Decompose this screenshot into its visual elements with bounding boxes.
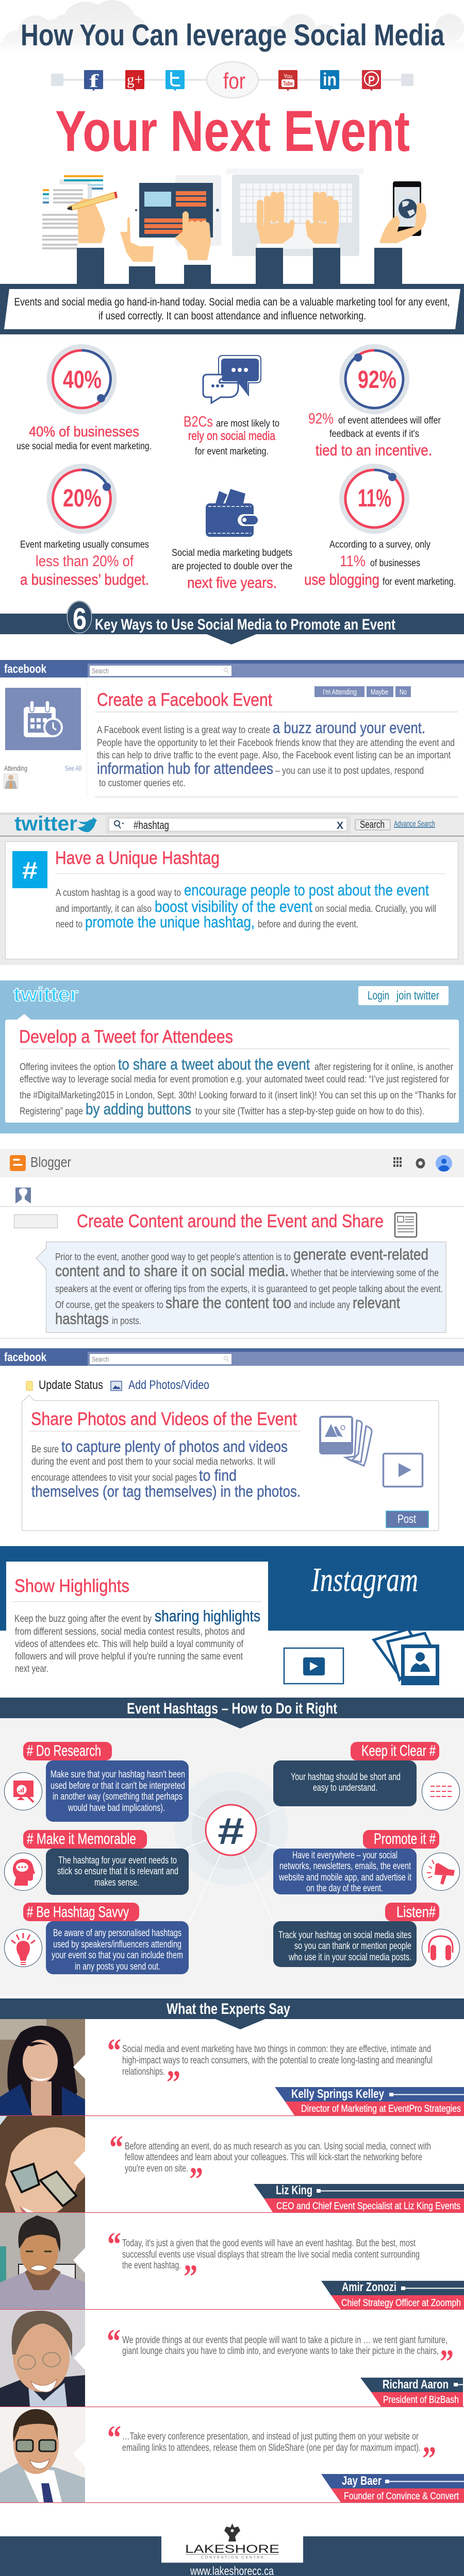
document and writing hand xyxy=(42,175,118,284)
stat: 92% of event attendees: 92% xyxy=(308,411,334,427)
tip: make it memorable: makes sense. xyxy=(94,1877,139,1888)
icon: google plus xyxy=(125,70,144,91)
tip: listen: Track your hashtag on social media sites xyxy=(278,1930,411,1941)
stat: budgets to double: next five years. xyxy=(187,574,277,591)
tip: be hashtag savvy: in any posts you send out. xyxy=(75,1961,160,1972)
tip: promote it xyxy=(273,1830,460,1894)
update status tabs: Add Photos/Video xyxy=(128,1378,209,1392)
heading: What the Experts Say xyxy=(167,2001,290,2018)
quote: Jay Baer: “ xyxy=(107,2419,121,2456)
icon: document xyxy=(395,1213,417,1237)
blue note card: in posts. xyxy=(112,1316,141,1327)
tip: do research: would have bad implications). xyxy=(68,1803,165,1814)
phone and hand xyxy=(374,181,426,284)
icon: youtube: Tube xyxy=(283,80,293,87)
body text: to customer queries etc. xyxy=(99,778,186,789)
tip: be hashtag savvy: Be aware of any personalised hashtags xyxy=(53,1928,181,1939)
tip: keep it clear xyxy=(273,1742,460,1810)
twitter search bar: #hashtag xyxy=(134,819,169,832)
footer band with logo xyxy=(0,2523,464,2576)
stat: budgets to double xyxy=(172,489,292,591)
tweet card: Registering” page xyxy=(20,1106,83,1117)
name banner: Liz King: Liz King xyxy=(276,2183,312,2197)
quote: Liz King: ” xyxy=(189,2161,203,2198)
attending sidebar xyxy=(4,764,81,789)
tweet card: by adding buttons xyxy=(86,1100,191,1118)
logo: Lakeshore Convention Centre: CONVENTION CENTRE xyxy=(201,2556,263,2560)
quote: Amir Zonozi: the event hashtag. xyxy=(122,2260,181,2271)
login box: join twitter xyxy=(396,989,439,1002)
status card: to capture plenty of photos and videos xyxy=(61,1437,288,1455)
stat: budgets to double: are projected to double over the xyxy=(172,561,292,572)
tweet card: Develop a Tweet for Attendees xyxy=(19,1027,233,1047)
for circle: for xyxy=(223,69,245,94)
tip: listen: so you can thank or mention people xyxy=(294,1941,411,1952)
tweet card: to your site (Twitter has a step-by-step guide on how to do this). xyxy=(195,1106,424,1117)
post button: Post xyxy=(397,1512,416,1526)
tablet and hands xyxy=(120,175,221,284)
icon: video xyxy=(384,1454,423,1487)
icon: youtube: You xyxy=(284,73,292,80)
section heading: 6 Key Ways: 6 xyxy=(73,602,87,636)
stat: 40% of businesses: use social media for event marketing. xyxy=(16,441,152,452)
tip: keep it clear: Your hashtag should be short and xyxy=(291,1772,401,1783)
name banner: Amir Zonozi xyxy=(321,2280,464,2309)
icon: chat bubbles xyxy=(203,355,261,403)
stat: B2Cs rely on social media: for event marketing. xyxy=(195,446,269,457)
status card: encourage attendees to visit your social pages xyxy=(31,1472,197,1483)
facebook header bar: Search xyxy=(92,667,109,675)
stat: 11% use blogging: use blogging xyxy=(304,571,379,588)
central hash emblem xyxy=(174,1772,288,1923)
icon: google plus: g+ xyxy=(127,71,143,88)
stat: B2Cs rely on social media: are most likely to xyxy=(216,418,279,429)
icon: silhouette xyxy=(15,1188,31,1204)
stat: less than 20% of budget: less than 20% of xyxy=(36,553,134,570)
quote: Kelly Springs Kelley xyxy=(107,2032,433,2102)
instagram wordmark: Instagram xyxy=(311,1561,418,1599)
login box xyxy=(358,986,449,1005)
icon: facebook: f xyxy=(89,71,99,91)
stat: 92% of event attendees: 92% xyxy=(358,366,396,394)
name banner: Amir Zonozi: Amir Zonozi xyxy=(342,2280,396,2294)
update status tabs xyxy=(26,1378,209,1392)
tip: listen xyxy=(273,1903,460,1967)
tip: promote it: Have it everywhere – your social xyxy=(292,1850,397,1861)
stat: 11% use blogging: 11% xyxy=(358,485,391,512)
quote: Amir Zonozi: ” xyxy=(184,2258,197,2296)
blogger header bar: Blogger xyxy=(30,1154,71,1170)
logo: Lakeshore Convention Centre: LAKESHORE xyxy=(185,2543,279,2555)
panel: develop a tweet for attendees xyxy=(0,980,464,1133)
quote: Kelly Springs Kelley: “ xyxy=(107,2032,121,2070)
blue note card: Of course, get the speakers to xyxy=(55,1300,163,1311)
twitter search bar: Search xyxy=(360,819,385,831)
body text: – you can use it to post updates, respond xyxy=(275,766,424,776)
status card: to find xyxy=(199,1466,237,1484)
panel: have a unique hashtag xyxy=(0,812,464,965)
stat: B2Cs rely on social media: rely on social media xyxy=(188,429,276,443)
icon: pinterest: P xyxy=(368,74,375,87)
photo: Richard Aaron xyxy=(0,2310,85,2406)
status card xyxy=(22,1395,439,1531)
tweet card: Offering invitees the option xyxy=(20,1062,115,1073)
status card: Share Photos and Videos of the Event xyxy=(31,1409,297,1429)
icon: youtube xyxy=(278,70,297,91)
photo: Amir Zonozi xyxy=(0,2213,85,2309)
section heading: 6 Key Ways: Key Ways to Use Social Media to Promote an Event xyxy=(95,616,395,633)
hashtag card: Have a Unique Hashtag xyxy=(55,848,220,868)
photo: Jay Baer xyxy=(0,2407,85,2502)
stat: 11% use blogging: According to a survey, only xyxy=(329,539,430,550)
keyboard and hands xyxy=(226,168,364,284)
attending sidebar: Attending xyxy=(4,764,27,772)
hashtag card: on social media. Crucially, you will xyxy=(315,904,436,914)
twitter search bar xyxy=(106,816,435,834)
stat: B2Cs rely on social media xyxy=(184,355,279,457)
logo: Lakeshore Convention Centre xyxy=(185,2523,279,2560)
body text: a buzz around your event. xyxy=(273,719,425,737)
panel: create a facebook event xyxy=(0,660,464,798)
panel: show highlights: Keep the buzz going after the event by xyxy=(14,1614,152,1624)
icon: photo stack xyxy=(374,1629,439,1685)
tweet card xyxy=(5,1014,459,1123)
rsvp buttons: I'm Attending xyxy=(323,688,357,697)
quote: Amir Zonozi xyxy=(107,2226,420,2296)
quote: Jay Baer: ” xyxy=(422,2440,436,2478)
tip: do research: # Do Research xyxy=(27,1742,101,1759)
status card: Be sure xyxy=(31,1444,59,1455)
rsvp buttons: No xyxy=(400,688,407,697)
panel: show highlights: sharing highlights xyxy=(155,1607,260,1625)
panel: show highlights: Show Highlights xyxy=(14,1576,129,1596)
icon: head xyxy=(4,1853,42,1891)
quote: Liz King xyxy=(109,2129,431,2198)
quote: Richard Aaron: ” xyxy=(440,2343,454,2381)
stat: 92% of event attendees xyxy=(308,344,441,459)
quote: Kelly Springs Kelley: ” xyxy=(167,2064,180,2102)
photo: Liz King xyxy=(0,2116,85,2221)
hashtag card: boost visibility of the event xyxy=(155,897,312,916)
tip: be hashtag savvy: # Be Hashtag Savvy xyxy=(27,1904,129,1921)
hashtag card: and importantly, it can also xyxy=(56,904,152,914)
icon: hash square: # xyxy=(22,857,38,884)
central hash emblem: # xyxy=(218,1811,244,1852)
status card: during the event and post them to your social media networks. It will xyxy=(31,1456,275,1467)
illustration: hands on devices xyxy=(42,168,426,284)
stat: 92% of event attendees: tied to an incentive. xyxy=(316,442,432,459)
icon: calendar xyxy=(5,688,81,750)
stat: 11% use blogging xyxy=(304,464,456,588)
icon: video frame xyxy=(284,1648,343,1684)
facebook header bar xyxy=(0,1348,464,1366)
update status tabs: Update Status xyxy=(39,1378,103,1392)
facebook header bar xyxy=(0,660,464,677)
login box: Login xyxy=(368,989,389,1002)
heading: Create Content around the Event and Share xyxy=(77,1211,384,1231)
stat: 40% of businesses: 40% of businesses xyxy=(29,423,139,439)
panel: show highlights: next year. xyxy=(15,1664,48,1674)
tip: do research xyxy=(4,1742,189,1822)
quote: Amir Zonozi: “ xyxy=(107,2226,121,2263)
name banner: Jay Baer: Jay Baer xyxy=(342,2474,382,2488)
tip: do research: Make sure that your hashtag hasn't been xyxy=(51,1769,185,1780)
blue note card xyxy=(36,1242,446,1332)
tip: make it memorable xyxy=(4,1830,189,1895)
icon: wallet xyxy=(206,489,258,537)
blue note card: and include any xyxy=(294,1300,350,1311)
status card: themselves (or tag themselves) in the photos. xyxy=(31,1482,301,1500)
panel: show highlights: followers and will prove helpful if you're running the same event xyxy=(15,1651,243,1662)
body text xyxy=(97,719,455,789)
rsvp buttons xyxy=(314,686,411,697)
tip: listen: Listen# xyxy=(396,1904,436,1921)
tweet card: to share a tweet about the event xyxy=(118,1055,310,1073)
twitter search bar: X xyxy=(337,820,344,832)
section: event hashtags xyxy=(0,1698,464,1996)
tip: keep it clear: Keep it Clear # xyxy=(361,1742,436,1759)
tip: be hashtag savvy xyxy=(4,1903,189,1974)
panel: show highlights: videos of attendees etc. This will help build a loyal community of xyxy=(15,1639,244,1650)
hashtag card xyxy=(5,842,458,959)
section heading: 6 Key Ways xyxy=(0,601,464,645)
blue note card: content and to share it on social media. xyxy=(55,1262,289,1280)
intro panel xyxy=(0,284,464,334)
tip: be hashtag savvy: your event so that you can include them xyxy=(52,1950,183,1961)
quote: Richard Aaron xyxy=(107,2323,454,2381)
icon: photos xyxy=(319,1416,372,1466)
facebook header bar: facebook xyxy=(4,1350,46,1364)
hashtag card: promote the unique hashtag, xyxy=(85,913,255,931)
icon: dashes xyxy=(422,1772,460,1810)
blue note card: share the content too xyxy=(165,1294,291,1312)
hashtag card: before and during the event. xyxy=(258,919,358,930)
for circle xyxy=(207,62,258,98)
social media icon row xyxy=(51,62,413,98)
tip: promote it: Promote it # xyxy=(374,1831,436,1848)
quote: Jay Baer xyxy=(107,2419,436,2478)
hashtag card: A custom hashtag is a good way to xyxy=(56,888,181,899)
quote: Liz King: “ xyxy=(109,2129,123,2166)
hashtag card: need to xyxy=(56,919,82,930)
tip: make it memorable: The hashtag for your event needs to xyxy=(58,1855,177,1866)
body text: information hub for attendees xyxy=(97,759,273,777)
tip: make it memorable: # Make it Memorable xyxy=(27,1831,136,1848)
panel: show highlights: from different sessions, social media contest results, photos and xyxy=(15,1626,245,1637)
name banner: Richard Aaron xyxy=(360,2378,463,2406)
quote: Liz King: you're even on site. xyxy=(125,2163,188,2174)
post button xyxy=(386,1511,428,1528)
intro text xyxy=(14,296,450,322)
attending sidebar: See All xyxy=(65,764,81,772)
quote: Richard Aaron: “ xyxy=(107,2323,121,2360)
stat: B2Cs rely on social media: B2Cs xyxy=(184,414,213,430)
stat: 11% use blogging: of businesses xyxy=(370,558,420,569)
stat: less than 20% of budget: a businesses’ budget. xyxy=(20,571,149,588)
icon: hash square xyxy=(12,851,47,888)
icon: headphones xyxy=(422,1929,460,1967)
quote: Kelly Springs Kelley: relationships. xyxy=(122,2066,165,2077)
stat: 40% of businesses: 40% xyxy=(63,366,102,394)
panel: create content around the event xyxy=(0,1149,464,1338)
tip: do research: used before or that it can't be interpreted xyxy=(51,1781,185,1791)
name banner: Kelly Springs Kelley: Kelly Springs Kelley xyxy=(291,2087,384,2101)
twitter logo outlined: twitter xyxy=(13,984,78,1006)
blue note card: Prior to the event, another good way to get people's attention is to xyxy=(55,1252,291,1263)
stat: 92% of event attendees: of event attendees will offer xyxy=(338,415,441,426)
facebook header bar: Search xyxy=(92,1355,109,1363)
intro text: if used correctly. It can boost attendance and influence networking. xyxy=(98,310,366,322)
icon: twitter xyxy=(165,70,185,91)
icon: pinterest xyxy=(362,70,381,91)
icon: lightbulb xyxy=(4,1929,42,1967)
heading: Create a Facebook Event xyxy=(97,690,272,710)
blue note card: generate event-related xyxy=(293,1245,428,1263)
blue note card: Whether that be interviewing some of the xyxy=(291,1268,439,1279)
section: what the experts say xyxy=(0,1998,464,2503)
tip: promote it: website and mobile app, and advertise it xyxy=(278,1872,412,1883)
name banner: Jay Baer xyxy=(321,2474,464,2502)
stat: 11% use blogging: 11% xyxy=(340,553,366,570)
tip: make it memorable: stick so ensure that it is relevant and xyxy=(57,1866,178,1877)
name banner: Liz King xyxy=(254,2183,464,2212)
stat: 92% of event attendees: feedback at events if it's xyxy=(329,429,419,439)
stat: less than 20% of budget xyxy=(20,464,149,588)
stat: 40% of businesses xyxy=(16,344,152,452)
photo: Kelly Springs Kelley xyxy=(0,2019,85,2115)
heading: Event Hashtags – How to Do it Right xyxy=(127,1700,337,1717)
name banner: Kelly Springs Kelley xyxy=(275,2087,464,2115)
icon: megaphone xyxy=(422,1853,460,1891)
tip: listen: who use it in your social media posts. xyxy=(288,1952,411,1963)
tip: keep it clear: easy to understand. xyxy=(313,1783,377,1793)
stat: less than 20% of budget: 20% xyxy=(63,485,102,512)
rsvp buttons: Maybe xyxy=(371,688,388,697)
facebook header bar: facebook xyxy=(4,662,46,675)
tip: promote it: on the day of the event. xyxy=(306,1883,383,1894)
twitter search bar: Advance Search xyxy=(394,820,435,828)
icon: facebook xyxy=(84,70,103,91)
panel: share photos and videos xyxy=(0,1348,464,1531)
tip: do research: in another way (something that perhaps xyxy=(53,1791,183,1802)
header cloud background xyxy=(0,0,464,57)
blogger header bar xyxy=(0,1149,464,1177)
stat: less than 20% of budget: Event marketing usually consumes xyxy=(20,539,149,550)
icon: linkedin: in xyxy=(323,70,337,90)
tip: promote it: networks, newsletters, emails, the event xyxy=(279,1861,411,1872)
stat: budgets to double: Social media marketing budgets xyxy=(172,548,292,558)
blue note card: relevant xyxy=(353,1294,400,1312)
tip: be hashtag savvy: used by speakers/influencers attending xyxy=(53,1939,181,1950)
blue note card: hashtags xyxy=(55,1310,109,1328)
icon: chart magnifier xyxy=(4,1772,42,1810)
panel: show highlights xyxy=(0,1546,464,1696)
twitter logo: twitter xyxy=(14,812,77,835)
body text: A Facebook event listing is a great way to create xyxy=(97,725,270,736)
